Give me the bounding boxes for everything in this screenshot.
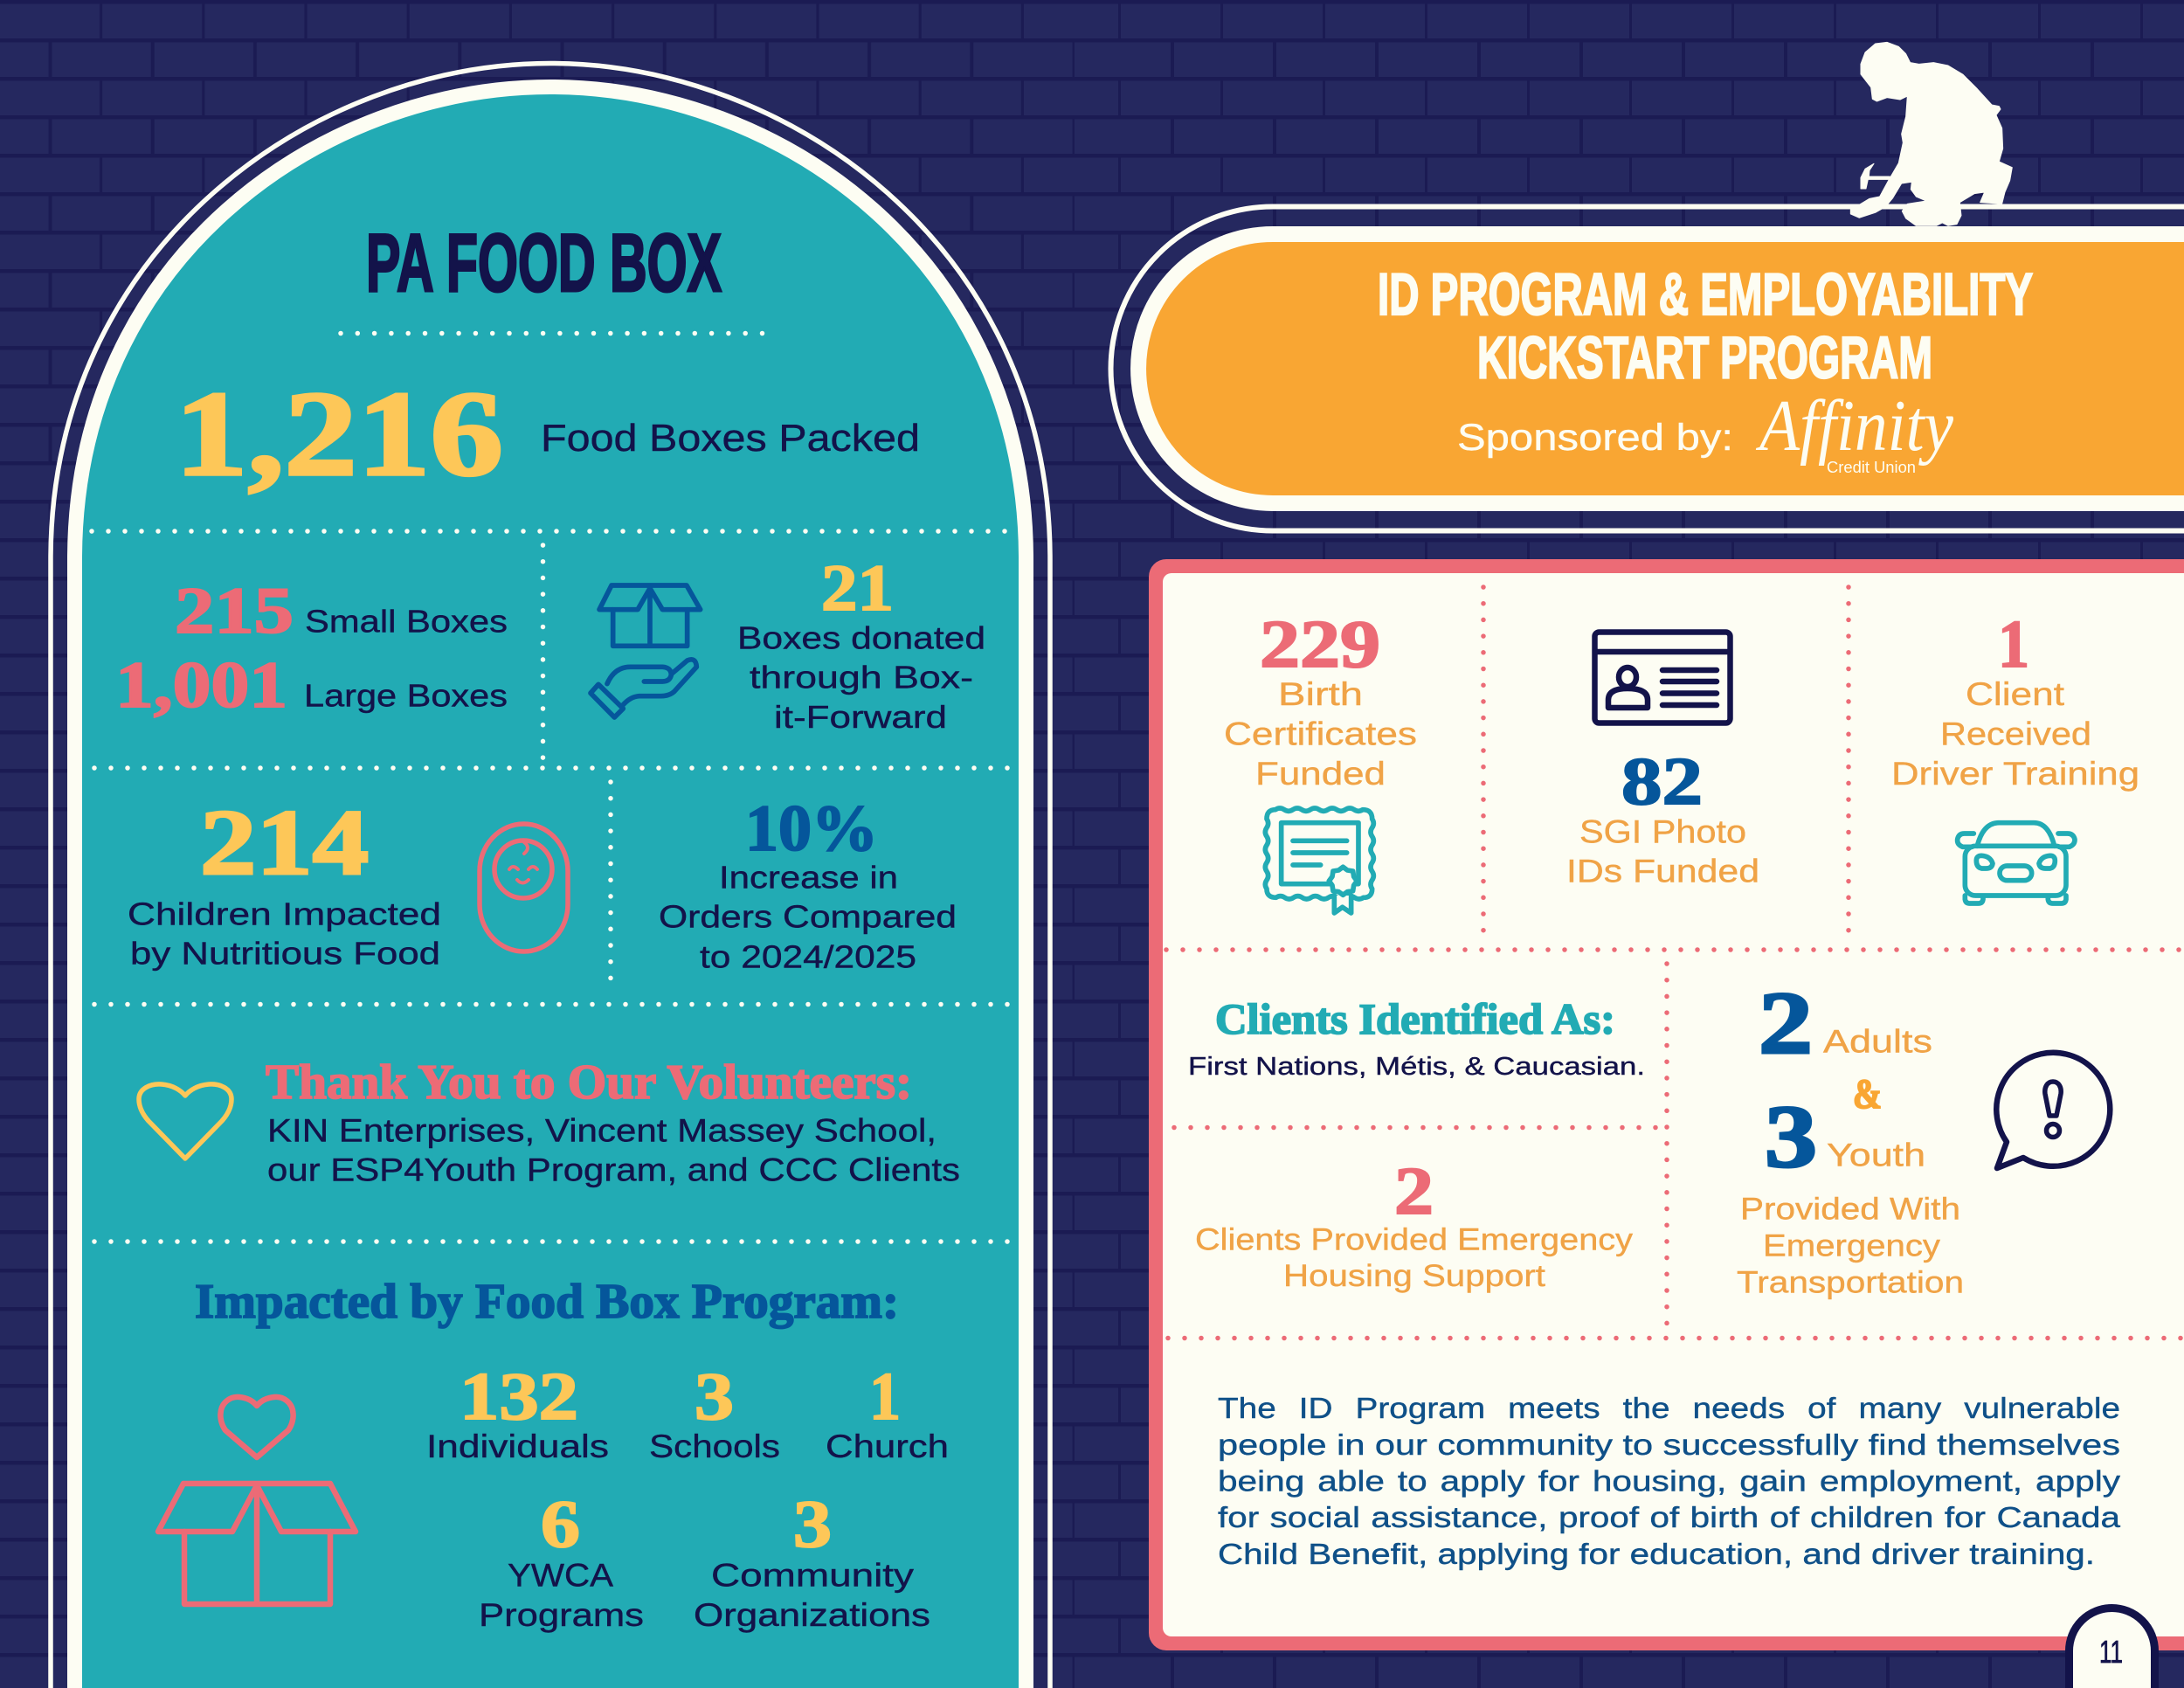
stat: 10% increase in orders bbox=[659, 792, 957, 975]
text block: thank you to volunteers: our ESP4Youth Program, and CCC Clients bbox=[267, 1152, 960, 1188]
text block: ID program description: The ID Program meets the needs of many vulnerable bbox=[1218, 1392, 2120, 1424]
stat: 2 adults and 3 youth emergency transportation: Youth bbox=[1827, 1138, 1925, 1173]
stat: 1 church bbox=[826, 1359, 949, 1464]
banner: ID Program and Employability Kickstart bbox=[1111, 206, 2184, 531]
stat: 21 boxes donated through Box-it-Forward: Boxes donated bbox=[737, 620, 985, 655]
stat: 6 YWCA programs: 6 bbox=[541, 1486, 580, 1561]
stat: small and large boxes bbox=[115, 575, 508, 722]
stat: 2 adults and 3 youth emergency transportation: & bbox=[1853, 1071, 1882, 1117]
stat: 1,216 food boxes packed: 1,216 bbox=[175, 367, 503, 502]
icon: car front view bbox=[1958, 823, 2075, 903]
text block: thank you to volunteers: Thank You to Our Volunteers: bbox=[266, 1055, 912, 1110]
text block: ID program description: for social assistance, proof of birth of children for Canada bbox=[1218, 1501, 2121, 1533]
stat: 6 YWCA programs bbox=[479, 1486, 644, 1633]
stat: 2 adults and 3 youth emergency transportation bbox=[1737, 974, 1964, 1300]
stat: 21 boxes donated through Box-it-Forward: through Box- bbox=[750, 659, 973, 695]
stat: 82 SGI photo IDs funded bbox=[1566, 744, 1759, 889]
stat: 21 boxes donated through Box-it-Forward bbox=[737, 552, 985, 735]
text block: ID program description: Child Benefit, applying for education, and driver training. bbox=[1218, 1538, 2095, 1570]
stat: 229 birth certificates funded: Certificates bbox=[1224, 716, 1417, 751]
stat: 6 YWCA programs: Programs bbox=[479, 1597, 644, 1633]
stat: 10% increase in orders: 10% bbox=[745, 792, 878, 865]
stat: 229 birth certificates funded bbox=[1224, 606, 1417, 792]
text block: ID program description: being able to apply for housing, gain employment, apply bbox=[1218, 1464, 2121, 1498]
stat: 229 birth certificates funded: Birth bbox=[1278, 676, 1363, 712]
stat: 2 adults and 3 youth emergency transportation: Adults bbox=[1823, 1024, 1932, 1059]
text block: thank you to volunteers bbox=[266, 1055, 960, 1188]
icon: open box with heart bbox=[158, 1397, 356, 1604]
icon: box over open hand bbox=[591, 585, 701, 717]
icon: swaddled baby bbox=[480, 824, 568, 951]
stat: 6 YWCA programs: YWCA bbox=[508, 1557, 613, 1594]
page number tab: 11 bbox=[2099, 1634, 2123, 1670]
stat: 82 SGI photo IDs funded: 82 bbox=[1621, 744, 1703, 819]
icon: certificate with ribbon bbox=[1265, 808, 1373, 913]
stat: 3 schools: 3 bbox=[695, 1359, 734, 1434]
stat: 1 client received driver training: Received bbox=[1940, 716, 2091, 751]
stat: small and large boxes: 215 bbox=[175, 575, 294, 647]
heading: impacted by food box program: Impacted by Food Box Program: bbox=[195, 1275, 899, 1329]
stat: 214 children impacted bbox=[128, 792, 441, 972]
stat: 82 SGI photo IDs funded: SGI Photo bbox=[1579, 814, 1746, 849]
stat: 214 children impacted: 214 bbox=[200, 792, 369, 895]
stat: 1,216 food boxes packed: Food Boxes Packed bbox=[541, 417, 920, 460]
text: sponsored by Affinity Credit Union: Sponsored by: bbox=[1457, 417, 1733, 459]
stat: 132 individuals bbox=[426, 1359, 609, 1464]
icon: photo ID card bbox=[1595, 633, 1730, 723]
stat: small and large boxes: Small Boxes bbox=[305, 603, 508, 640]
stat: 2 adults and 3 youth emergency transportation: Transportation bbox=[1737, 1265, 1964, 1300]
stat: 3 community organizations: Organizations bbox=[694, 1597, 930, 1633]
stat: 21 boxes donated through Box-it-Forward: it-Forward bbox=[774, 699, 947, 735]
stat: 2 clients emergency housing bbox=[1195, 1153, 1634, 1293]
icon: crouching worker silhouette with hammer bbox=[1850, 42, 2012, 225]
stat: small and large boxes: 1,001 bbox=[115, 649, 287, 722]
stat: small and large boxes: Large Boxes bbox=[304, 678, 508, 713]
panel: PA Food Box arch bbox=[51, 63, 1050, 1688]
stat: 2 adults and 3 youth emergency transportation: Emergency bbox=[1763, 1228, 1941, 1263]
stat: 10% increase in orders: Increase in bbox=[719, 860, 898, 895]
stat: 10% increase in orders: Orders Compared bbox=[659, 898, 957, 935]
text block: ID program description bbox=[1218, 1392, 2121, 1570]
stat: 229 birth certificates funded: 229 bbox=[1260, 606, 1380, 681]
stat: 2 clients emergency housing: 2 bbox=[1394, 1153, 1434, 1228]
stat: 82 SGI photo IDs funded: IDs Funded bbox=[1566, 853, 1759, 889]
stat: 2 clients emergency housing: Clients Provided Emergency bbox=[1195, 1223, 1634, 1256]
stat: 1 client received driver training: 1 bbox=[1998, 606, 2029, 681]
stat: 132 individuals: Individuals bbox=[426, 1429, 609, 1464]
icon: speech bubble with exclamation bbox=[1996, 1053, 2110, 1168]
text block: clients identified as: First Nations, Métis, & Caucasian. bbox=[1188, 1053, 1645, 1081]
stat: 132 individuals: 132 bbox=[460, 1359, 578, 1434]
stat: 1 church: 1 bbox=[869, 1359, 901, 1434]
stat: 1 client received driver training: Driver Training bbox=[1891, 756, 2139, 792]
stat: 1 client received driver training: Client bbox=[1966, 676, 2065, 712]
text block: clients identified as: Clients Identified As: bbox=[1215, 994, 1615, 1043]
heading: program title: KICKSTART PROGRAM bbox=[1477, 325, 1932, 391]
panel: ID program results bbox=[1149, 559, 2184, 1650]
stat: 214 children impacted: Children Impacted bbox=[128, 896, 441, 931]
heading: PA Food Box: PA FOOD BOX bbox=[366, 217, 722, 308]
text block: clients identified as bbox=[1188, 994, 1645, 1081]
text: sponsored by Affinity Credit Union: Credit Union bbox=[1827, 459, 1916, 476]
stat: 214 children impacted: by Nutritious Food bbox=[130, 935, 440, 972]
stat: 3 community organizations bbox=[694, 1486, 930, 1633]
stat: 1 church: Church bbox=[826, 1429, 949, 1464]
stat: 3 community organizations: Community bbox=[711, 1557, 915, 1594]
stat: 3 schools bbox=[649, 1359, 780, 1464]
stat: 2 adults and 3 youth emergency transportation: Provided With bbox=[1740, 1192, 1960, 1227]
stat: 3 schools: Schools bbox=[649, 1429, 780, 1464]
icon: yellow heart bbox=[139, 1084, 232, 1159]
text: sponsored by Affinity Credit Union: Affinity bbox=[1756, 385, 1954, 467]
stat: 3 community organizations: 3 bbox=[793, 1486, 832, 1561]
stat: 2 clients emergency housing: Housing Support bbox=[1283, 1259, 1545, 1293]
text block: ID program description: people in our community to successfully find themselves bbox=[1218, 1429, 2120, 1461]
text: sponsored by Affinity Credit Union bbox=[1457, 385, 1954, 476]
stat: 2 adults and 3 youth emergency transportation: 3 bbox=[1765, 1088, 1817, 1186]
stat: 10% increase in orders: to 2024/2025 bbox=[700, 938, 916, 975]
stat: 1 client received driver training bbox=[1891, 606, 2139, 792]
stat: 21 boxes donated through Box-it-Forward: 21 bbox=[821, 552, 894, 625]
text block: thank you to volunteers: KIN Enterprises, Vincent Massey School, bbox=[267, 1113, 936, 1148]
heading: program title bbox=[1378, 261, 2033, 391]
stat: 1,216 food boxes packed bbox=[175, 367, 920, 502]
stat: 2 adults and 3 youth emergency transportation: 2 bbox=[1759, 974, 1813, 1073]
page number tab bbox=[2069, 1608, 2154, 1688]
stat: 229 birth certificates funded: Funded bbox=[1255, 756, 1386, 792]
